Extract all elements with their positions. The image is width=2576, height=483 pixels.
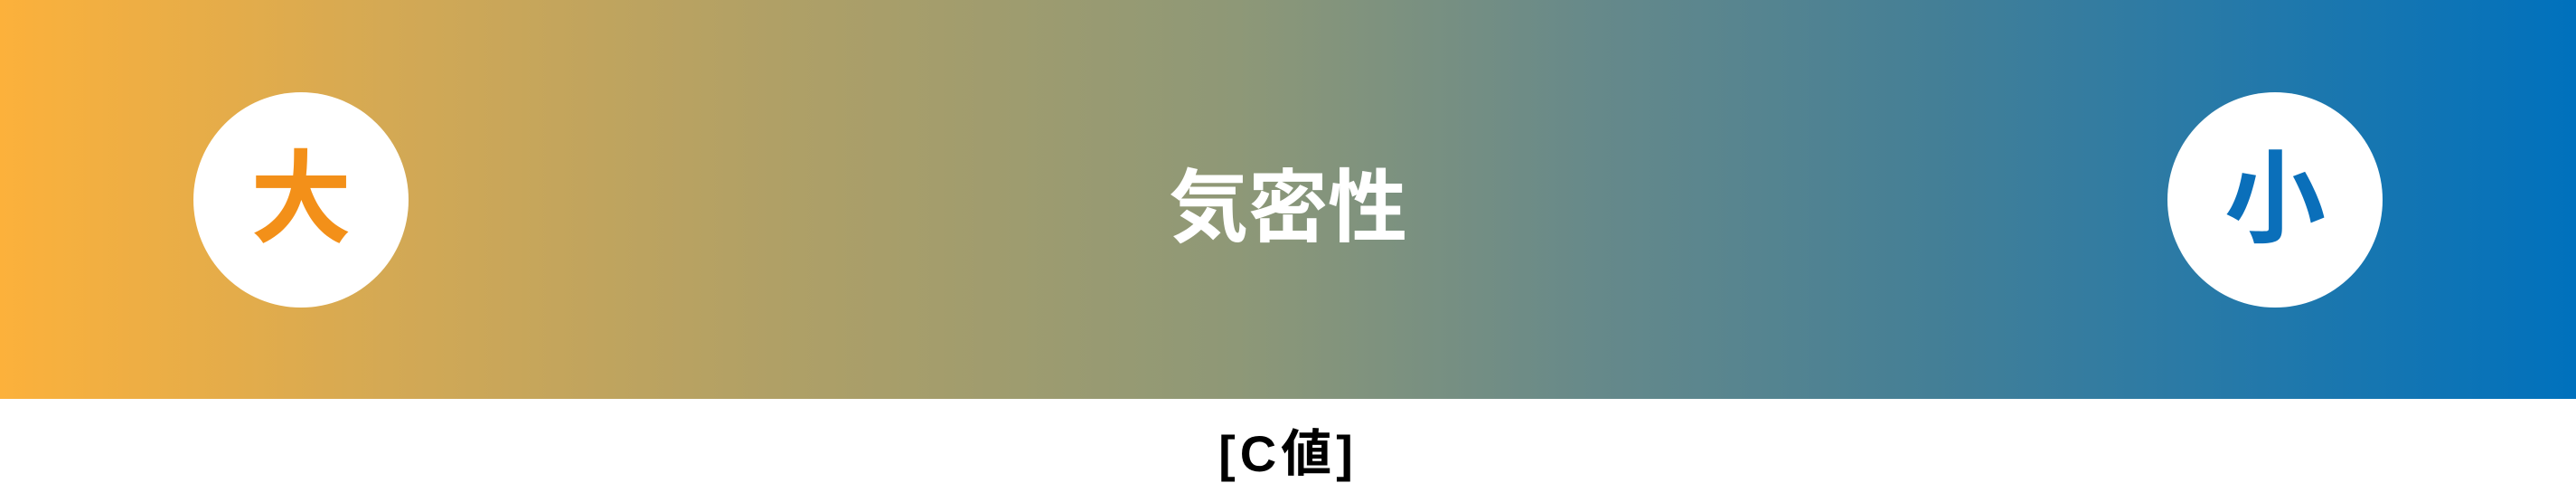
circle: small: 小 xyxy=(2224,143,2326,256)
circle: small xyxy=(2167,92,2383,308)
circle: large xyxy=(193,92,409,308)
title: 気密性 xyxy=(1169,163,1407,252)
circle: large: 大 xyxy=(250,143,352,256)
label: C value: [C値] xyxy=(1218,425,1358,482)
